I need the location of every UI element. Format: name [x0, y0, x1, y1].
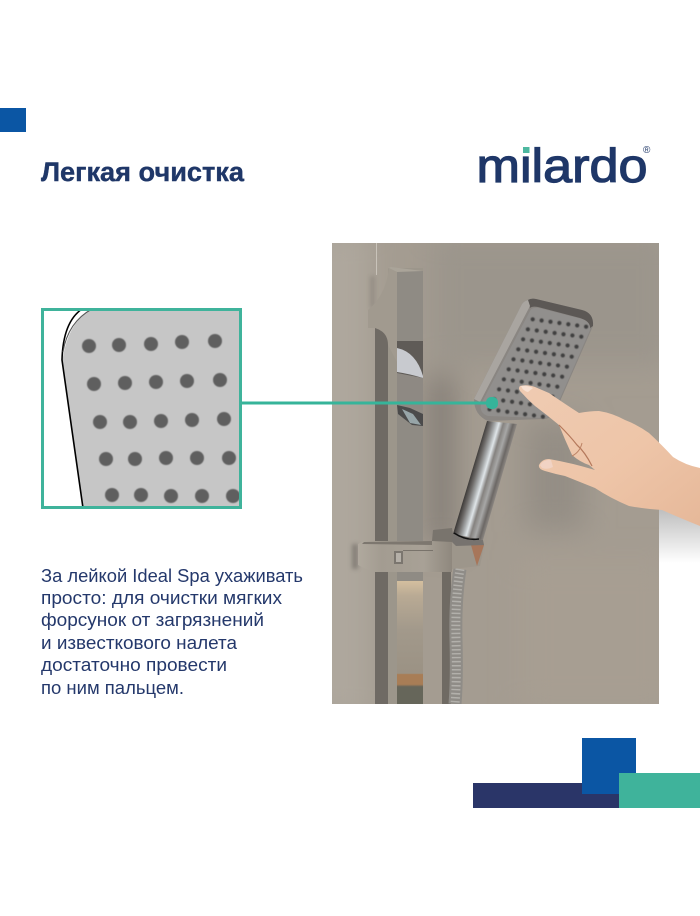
- shower handle: [452, 421, 517, 546]
- body text: форсунок от загрязнений: [41, 610, 264, 630]
- connector line: [242, 397, 498, 409]
- corner accent square: [0, 108, 26, 132]
- hand: [519, 385, 700, 526]
- body text: и известкового налета: [41, 633, 238, 653]
- rail shadow: [370, 276, 389, 704]
- logo: milardo: ®: [643, 145, 651, 156]
- body text: [41, 566, 303, 698]
- lower mirror reflection: [397, 581, 423, 704]
- hose shadow strip: [442, 570, 451, 704]
- holder side shadow: [352, 544, 358, 569]
- wire line: [376, 243, 377, 275]
- body text: по ним пальцем.: [41, 678, 184, 698]
- wall tone patches: [332, 243, 650, 704]
- photo: shower on concrete wall: [332, 243, 659, 704]
- body text: просто: для очистки мягких: [41, 588, 282, 608]
- nozzles: [82, 334, 240, 503]
- body text: достаточно провести: [41, 655, 227, 675]
- right edge shadow under hand: [659, 505, 700, 563]
- logo: milardo: milardo: [476, 140, 648, 193]
- slide rail: [375, 268, 423, 704]
- decorative brand blocks: [473, 738, 700, 808]
- shower head: [474, 299, 593, 421]
- title: Легкая очистка: [41, 157, 245, 187]
- hose: [455, 569, 460, 704]
- nozzle grid: [487, 317, 588, 419]
- body text: За лейкой Ideal Spa ухаживать: [41, 566, 303, 586]
- sliding holder: [358, 528, 484, 572]
- inset: nozzle close-up: [41, 308, 242, 509]
